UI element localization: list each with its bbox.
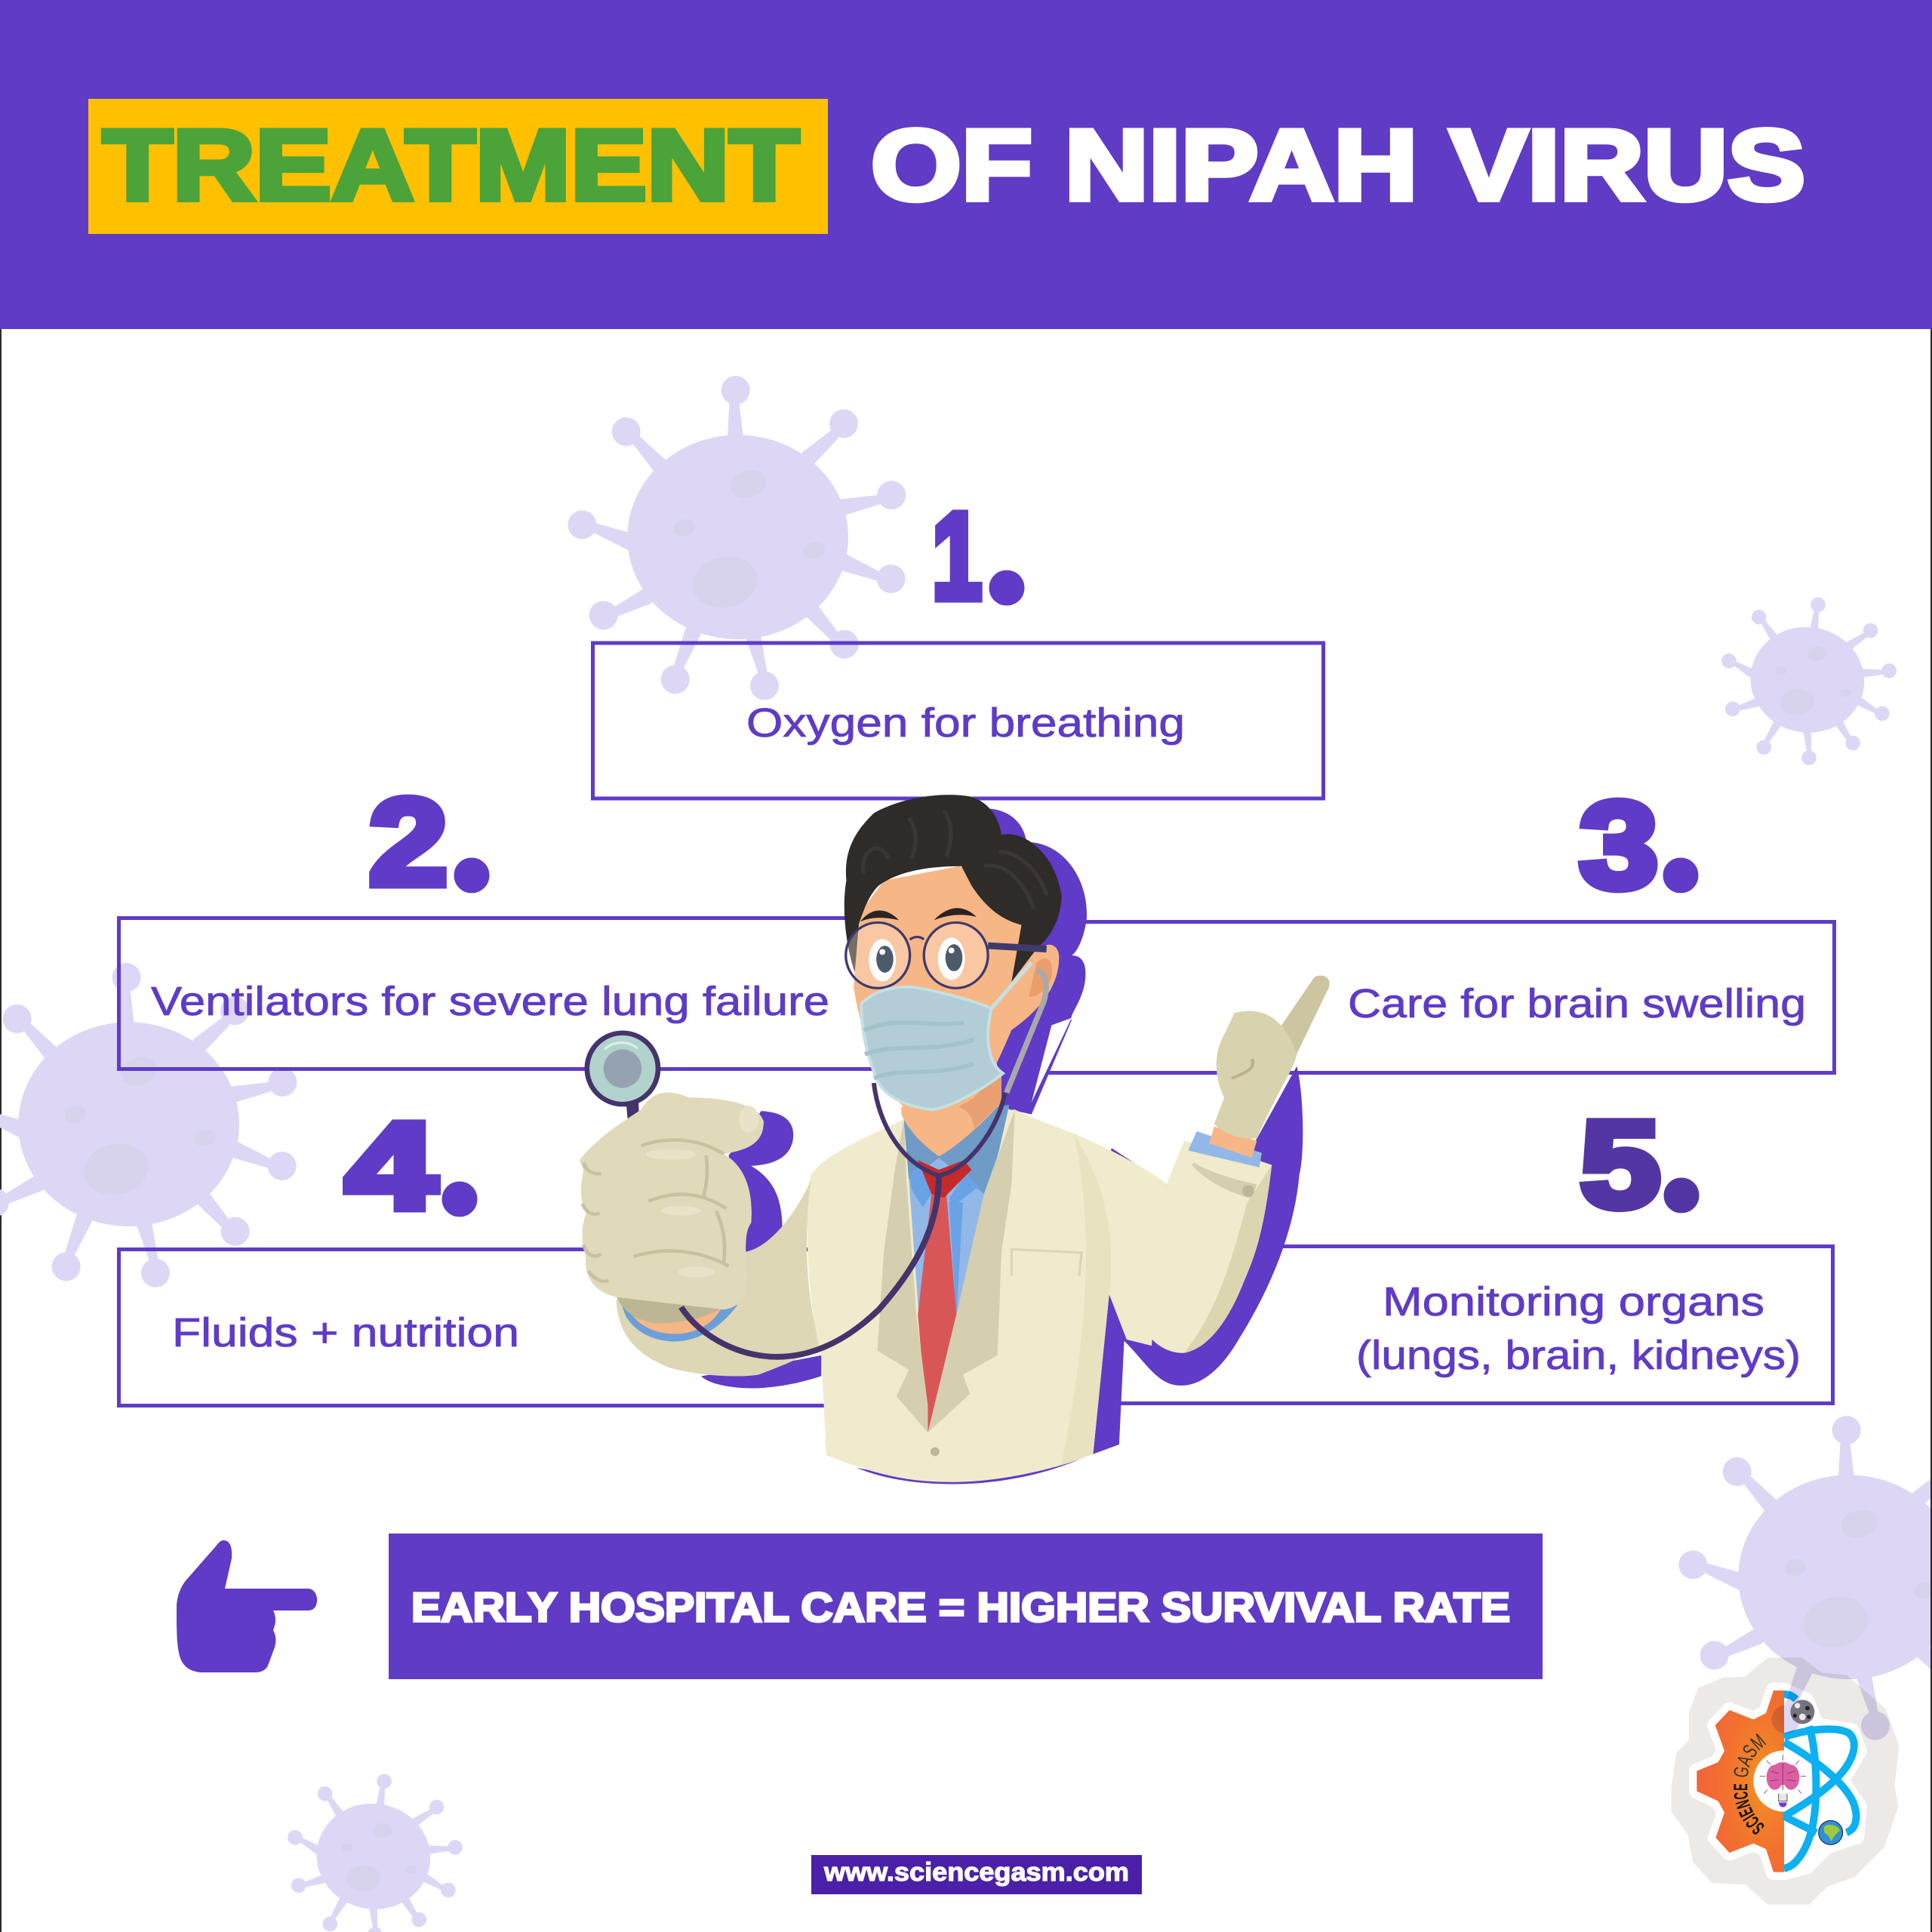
box 4: Fluids + nutrition: [172, 1310, 519, 1355]
virus: bottom right, overlapping logo: [1678, 1416, 1932, 1740]
logo: Sciencegasm: SCIENCE: [1734, 1784, 1764, 1835]
number 3: [1580, 726, 1703, 927]
box 1: Oxygen for breathing: [746, 700, 1185, 746]
eyes: [869, 937, 965, 981]
number 5: [1580, 1046, 1704, 1247]
number 4: 4: [346, 1097, 436, 1235]
banner: key message: [389, 1534, 1543, 1679]
title: OF NIPAH VIRUS: OF NIPAH VIRUS: [871, 110, 1805, 222]
face mask: [861, 962, 1032, 1109]
logo: Sciencegasm: [1671, 1657, 1899, 1905]
number 5: .: [1659, 1046, 1704, 1247]
box 1: [593, 643, 1324, 798]
doctor purple shadow: [701, 808, 1303, 1484]
website tag: [811, 1855, 1142, 1894]
lab coat: [808, 1109, 1167, 1482]
title highlight: TREATMENT: TREATMENT: [103, 110, 799, 222]
box 4: [119, 1250, 874, 1405]
virus: top right small: [1708, 584, 1906, 777]
number 1: [932, 438, 1029, 639]
neck and shirt: [901, 1073, 1009, 1317]
box 2: Ventilators for severe lung failure: [151, 979, 829, 1024]
title highlight: TREATMENT: [88, 99, 828, 234]
number 3: .: [1658, 726, 1703, 927]
icon: pointing hand: [177, 1540, 317, 1672]
left cuff: [616, 1295, 737, 1342]
virus: bottom left small: [274, 1761, 472, 1932]
face: [854, 866, 1059, 1112]
right glove: [1214, 976, 1330, 1139]
box 5: (lungs, brain, kidneys): [1356, 1333, 1801, 1378]
coat lapels: [878, 1109, 1015, 1432]
number 2: .: [449, 726, 494, 927]
stethoscope: [681, 970, 1046, 1357]
virus: left: [0, 963, 297, 1287]
logo planets: [1790, 1700, 1843, 1844]
eyebrows: [860, 908, 977, 921]
box 5: [1057, 1247, 1832, 1404]
logo: Sciencegasm: GASM: [1734, 1734, 1766, 1777]
number 2: 2: [369, 773, 448, 911]
website tag: www.sciencegasm.com: [823, 1858, 1129, 1887]
white gap in shadow: [1032, 1018, 1072, 1103]
virus: top centre: [568, 376, 906, 700]
right sleeve: [1139, 1141, 1272, 1353]
hair: [844, 795, 1062, 982]
box 3: Care for brain swelling: [1348, 981, 1806, 1026]
stethoscope head: [587, 1033, 658, 1129]
header band: [0, 0, 1932, 329]
doctor illustration: [580, 795, 1330, 1484]
banner: key message: EARLY HOSPITAL CARE = HIGHER SURVIVAL RATE: [411, 1583, 1510, 1630]
number 4: [346, 1050, 482, 1251]
box 3: [981, 922, 1834, 1073]
number 2: [369, 726, 494, 927]
number 1: 1: [932, 487, 982, 625]
number 5: 5: [1580, 1095, 1660, 1233]
number 1: .: [984, 438, 1029, 639]
glasses: [846, 922, 1047, 988]
left glove fist: [580, 1092, 764, 1309]
necktie: [918, 1160, 971, 1432]
right wrist and cuff: [1188, 1127, 1262, 1168]
box 5: Monitoring organs: [1383, 1279, 1764, 1324]
left sleeve: [616, 1180, 819, 1377]
number 3: 3: [1580, 776, 1658, 914]
box 2: [119, 918, 889, 1069]
number 4: .: [437, 1050, 482, 1251]
